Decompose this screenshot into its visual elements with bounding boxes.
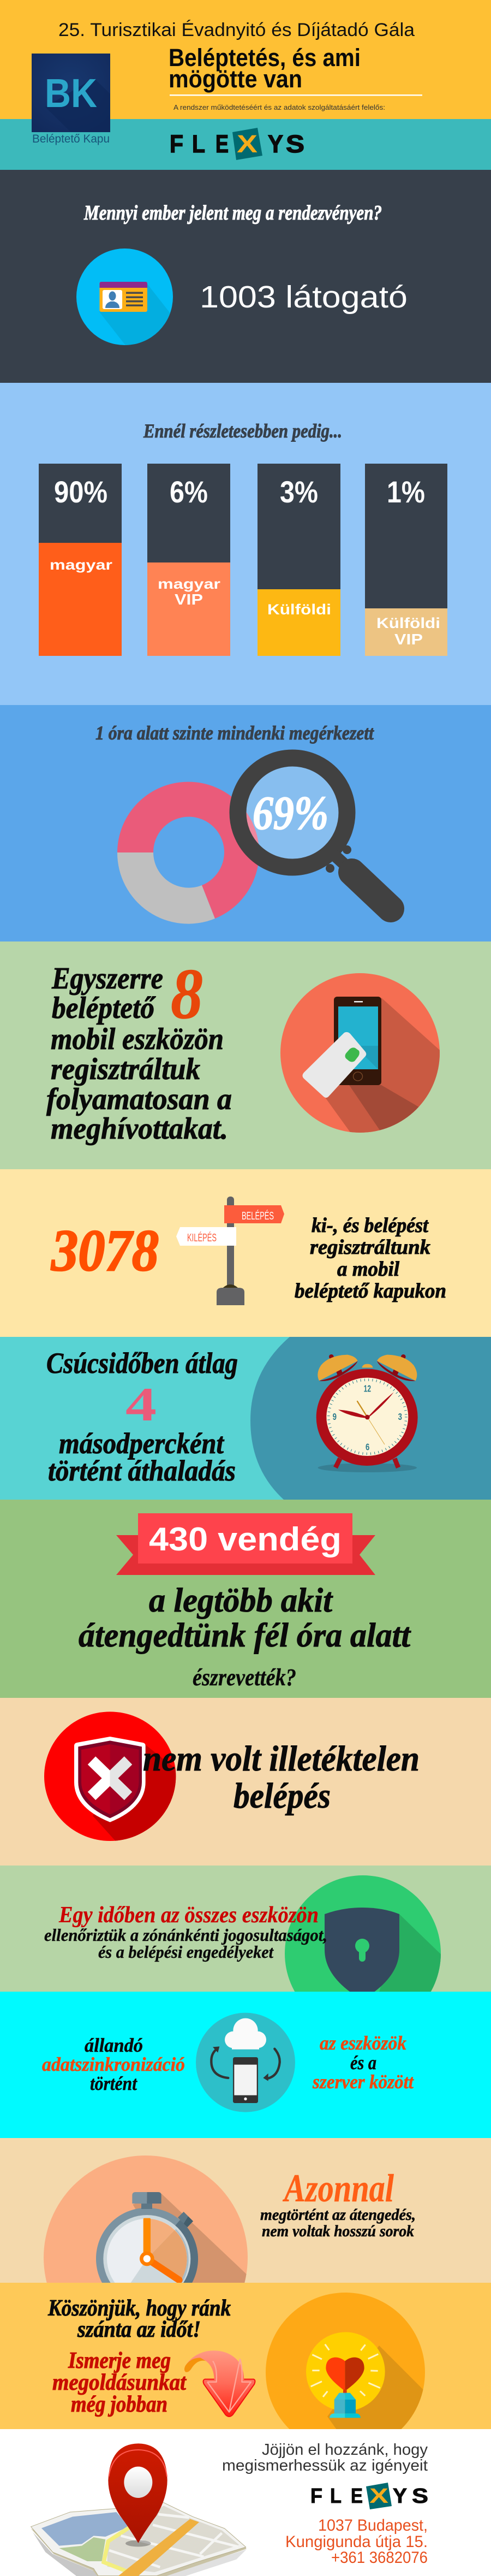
logo: Flexys: X xyxy=(369,2485,389,2508)
bar: magyar 90%: magyar xyxy=(50,556,112,573)
logo: Flexys: F xyxy=(310,2485,322,2508)
icon: alarm clock: 3 xyxy=(398,1411,402,1422)
text block: átengedtünk fél óra alatt xyxy=(79,1617,411,1654)
text block xyxy=(79,1582,411,1691)
bar: magyar 90% xyxy=(39,464,122,656)
call to action text: Ismerje meg xyxy=(68,2348,171,2373)
thanks text xyxy=(47,2296,231,2342)
bar: Külföldi 3%: 3% xyxy=(280,475,318,509)
panel: contact xyxy=(31,2443,428,2576)
left text xyxy=(42,2034,185,2094)
panel: visitors count xyxy=(0,170,491,383)
icon: cloud sync xyxy=(196,2013,295,2112)
address: Kungigunda útja 15. xyxy=(285,2533,428,2551)
text block: ellenőriztük a zónánkénti jogosultaságot, xyxy=(44,1925,327,1945)
logo: Beléptető Kapu xyxy=(32,54,110,145)
heading: Ennél részletesebben pedig... xyxy=(143,420,342,442)
stat: visitors: 1003 látogató xyxy=(200,280,408,315)
bar: magyar VIP 6%: 6% xyxy=(170,475,208,509)
logo: Flexys: Y xyxy=(393,2485,407,2508)
logo: Flexys: L xyxy=(192,130,205,158)
bar: magyar VIP 6%: VIP xyxy=(175,591,203,608)
right text: az eszközök xyxy=(320,2032,406,2054)
text block: a legtöbb akit xyxy=(149,1582,333,1619)
ribbon banner: 430 vendég xyxy=(149,1521,342,1558)
text block: és a belépési engedélyeket xyxy=(98,1942,274,1962)
text block: meghívottakat. xyxy=(51,1112,228,1146)
panel: no unauthorized entry xyxy=(0,1698,491,1866)
text block: folyamatosan a xyxy=(46,1082,232,1116)
text block: Azonnal xyxy=(283,2166,394,2210)
icon: red shield xyxy=(44,1712,180,1844)
panel: header yellow band xyxy=(0,0,491,119)
logo: Flexys: S xyxy=(286,130,304,158)
icon: signpost xyxy=(176,1197,284,1305)
text block xyxy=(46,1347,238,1487)
ribbon banner xyxy=(116,1513,375,1575)
thanks text: Köszönjük, hogy ránk xyxy=(47,2296,231,2321)
text block: Csúcsidőben átlag xyxy=(46,1347,238,1379)
text block: nem voltak hosszú sorok xyxy=(262,2222,414,2240)
logo: Flexys xyxy=(310,2483,428,2509)
responsibility note: A rendszer működtetéséért és az adatok szolgáltatásáért felelős: xyxy=(173,103,385,111)
text block: mobil eszközön xyxy=(51,1022,224,1056)
panel: arrivals within an hour xyxy=(0,705,491,941)
bar: Külföldi 3%: Külföldi xyxy=(267,601,331,618)
text block xyxy=(295,1214,446,1302)
left text: adatszinkronizáció xyxy=(42,2053,185,2075)
bar: Külföldi 3% xyxy=(258,464,340,656)
logo: Flexys: F xyxy=(170,130,183,158)
panel: peak time xyxy=(0,1337,491,1500)
main title xyxy=(169,44,361,93)
panel: thank you xyxy=(0,2283,491,2429)
call to action text: megoldásunkat xyxy=(52,2370,187,2395)
heading: Mennyi ember jelent meg a rendezvényen? xyxy=(83,202,382,224)
main title: mögötte van xyxy=(169,65,302,93)
event title: 25. Turisztikai Évadnyitó és Díjátadó Gála xyxy=(58,20,415,40)
icon: signpost: KILÉPÉS xyxy=(187,1231,217,1244)
heading: 1 óra alatt szinte mindenki megérkezett xyxy=(95,722,374,744)
logo: Flexys: E xyxy=(215,130,229,158)
text block xyxy=(260,2166,416,2240)
text block: beléptető xyxy=(52,991,156,1025)
address: 1037 Budapest, xyxy=(318,2516,428,2534)
address: +361 3682076 xyxy=(331,2549,428,2567)
logo: Flexys: S xyxy=(412,2485,428,2508)
icon: phone and card xyxy=(280,973,445,1141)
arrow: curved red down arrow xyxy=(184,2350,255,2417)
icon: alarm clock xyxy=(316,1354,418,1472)
right text xyxy=(312,2032,414,2093)
stat: 4 seconds: 4 xyxy=(125,1378,157,1431)
logo: Flexys: X xyxy=(237,130,258,158)
logo: Beléptető Kapu: Beléptető Kapu xyxy=(32,133,110,145)
icon: magnifying glass: 69% xyxy=(253,787,328,840)
left text: állandó xyxy=(85,2034,143,2056)
panel: teal logo band xyxy=(0,119,491,170)
text block: ki-, és belépést xyxy=(312,1214,429,1237)
icon: alarm clock: 6 xyxy=(366,1441,369,1452)
right text: és a xyxy=(350,2052,376,2074)
text block: észrevették? xyxy=(193,1664,296,1691)
text block: másodpercként xyxy=(59,1427,225,1460)
icon: heart bulb xyxy=(266,2293,425,2429)
thanks text: szánta az időt! xyxy=(77,2317,201,2342)
text block: a mobil xyxy=(337,1258,399,1281)
text block: regisztráltuk xyxy=(51,1052,200,1086)
main title: Beléptetés, és ami xyxy=(169,44,361,72)
left text: történt xyxy=(90,2072,137,2094)
logo: Flexys: Y xyxy=(268,130,283,158)
panel: 430 guests xyxy=(0,1500,491,1698)
text block: belépés xyxy=(233,1776,331,1816)
panel: immediate entry xyxy=(0,2138,491,2283)
bar: magyar VIP 6% xyxy=(147,464,230,656)
bar: Külföldi VIP 1%: Külföldi xyxy=(376,615,440,631)
text block: Egyszerre xyxy=(51,962,163,996)
icon: alarm clock: 9 xyxy=(333,1411,337,1422)
text block: Egy időben az összes eszközön xyxy=(58,1903,319,1928)
call to action text: még jobban xyxy=(71,2392,167,2417)
logo: Flexys xyxy=(170,128,304,160)
bar: magyar 90%: 90% xyxy=(54,475,107,509)
text block xyxy=(143,1739,420,1816)
donut chart xyxy=(117,782,259,924)
panel: mobile devices xyxy=(0,941,491,1169)
icon: signpost: BELÉPÉS xyxy=(242,1210,274,1222)
bar: Külföldi VIP 1% xyxy=(365,464,447,656)
text block xyxy=(46,962,232,1146)
text block: nem volt illetéktelen xyxy=(143,1739,420,1779)
icon: ID card xyxy=(76,248,177,350)
stat: 3078: 3078 xyxy=(51,1218,159,1283)
icon: lock shield xyxy=(285,1875,441,1992)
text block: regisztráltunk xyxy=(310,1236,430,1259)
logo: Beléptető Kapu: BK xyxy=(45,70,97,116)
logo: Flexys: E xyxy=(351,2485,363,2508)
text block: megtörtént az átengedés, xyxy=(260,2206,416,2224)
invitation text xyxy=(222,2441,428,2474)
icon: alarm clock: 12 xyxy=(364,1383,371,1394)
panel: registrations xyxy=(0,1169,491,1337)
panel: permission check xyxy=(0,1866,491,1992)
icon: stopwatch xyxy=(44,2155,248,2283)
logo: Flexys: L xyxy=(330,2485,342,2508)
call to action text xyxy=(52,2348,187,2417)
invitation text: Jöjjön el hozzánk, hogy xyxy=(262,2441,428,2459)
icon: map with pin xyxy=(31,2443,247,2576)
text block: történt áthaladás xyxy=(48,1454,236,1487)
text block xyxy=(44,1903,327,1962)
right text: szerver között xyxy=(312,2071,414,2093)
panel: data sync xyxy=(0,1992,491,2138)
invitation text: megismerhessük az igényeit xyxy=(222,2457,428,2474)
address xyxy=(285,2516,428,2567)
panel: visitor breakdown xyxy=(0,383,491,705)
text block: beléptető kapukon xyxy=(295,1280,446,1302)
icon: magnifying glass xyxy=(238,758,391,909)
bar: magyar VIP 6%: magyar xyxy=(158,576,220,592)
bar: Külföldi VIP 1%: VIP xyxy=(394,631,423,648)
stat: 8 devices: 8 xyxy=(171,954,203,1034)
bar: Külföldi VIP 1%: 1% xyxy=(387,475,425,509)
